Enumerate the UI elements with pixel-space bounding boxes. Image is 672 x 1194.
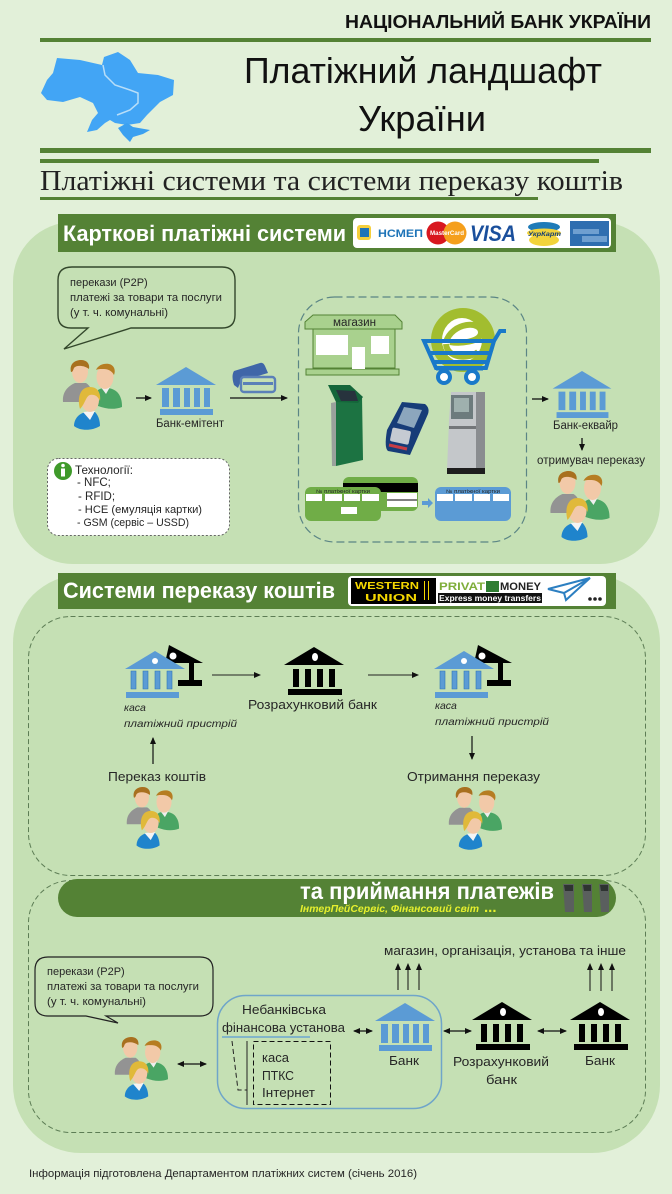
label: money transfer: Переказ коштів — [108, 769, 206, 784]
callout: transfers and payments: платежі за товари та послуги — [70, 292, 222, 304]
bank — [375, 1003, 435, 1068]
issuer bank — [156, 367, 225, 430]
callout: transfers and payments: (у т. ч. комунальні) — [47, 996, 146, 1008]
info box: technologies: - NFC; — [77, 477, 111, 489]
icon: recipient people — [550, 471, 610, 541]
logos: transfer systems: WESTERN — [355, 580, 419, 592]
channels box: каса — [262, 1050, 290, 1065]
footer note: Інформація підготовлена Департаментом платіжних систем (січень 2016) — [29, 1168, 417, 1180]
channels box — [254, 1042, 330, 1104]
icon: people — [115, 1037, 168, 1100]
arrow: sender up — [152, 738, 154, 764]
main title: України — [358, 98, 486, 139]
icon: e-commerce cart — [424, 308, 506, 383]
main title — [244, 50, 602, 139]
acquirer bank: Банк-еквайр — [553, 420, 618, 432]
panel: payment acceptance flow — [28, 878, 646, 1132]
logos: card systems: VISA — [470, 221, 516, 246]
panel: money transfer and payments — [13, 573, 660, 1153]
logos: transfer systems: UNION — [365, 592, 417, 604]
arrows: bank outputs — [398, 964, 419, 990]
info box: technologies: - GSM (сервіс – USSD) — [77, 517, 189, 529]
icon: sender people — [63, 360, 122, 430]
subtitle: Платіжні системи та системи переказу коштів — [40, 166, 623, 197]
logos: transfer systems: PRIVAT — [439, 581, 485, 593]
sender point: cash desk, payment device: платіжний пристрій — [124, 718, 237, 730]
callout: transfers and payments: платежі за товари та послуги — [47, 981, 199, 993]
info box: technologies: Технології: — [75, 465, 133, 477]
heading bar: money transfer systems — [58, 573, 616, 609]
panel: card payment systems — [13, 214, 660, 564]
icon: receiver people — [449, 787, 502, 850]
settlement bank: Розрахунковий — [453, 1054, 549, 1069]
label: receiving the transfer: Отримання переказу — [407, 769, 541, 784]
icon: POS terminal — [386, 402, 429, 455]
icon: payment kiosk — [328, 385, 363, 466]
info box: technologies: - HCE (емуляція картки) — [78, 504, 202, 516]
issuer bank: Банк-емітент — [156, 418, 225, 430]
icon: bank cards — [232, 363, 275, 392]
arrow: settlement bank to bank — [538, 1030, 566, 1032]
panel: transfer flow — [28, 616, 646, 876]
label: shop, organisation, institution: магазин, організація, установа та інше — [384, 943, 626, 958]
arrow: acquirer to recipient — [581, 438, 583, 450]
receiver point: cash desk, payment device: платіжний пристрій — [435, 716, 549, 728]
second bank: Банк — [585, 1053, 615, 1068]
icon: sender people — [127, 787, 179, 849]
icon: shop — [305, 315, 402, 375]
panel: non-bank financial institution: Небанківська — [242, 1002, 327, 1017]
arrow: issuer bank to acceptance points — [230, 397, 287, 399]
receiver point: cash desk, payment device — [434, 645, 549, 728]
logos: transfer systems — [348, 576, 606, 606]
settlement bank: банк — [486, 1072, 517, 1087]
icon: map of Ukraine — [41, 52, 174, 142]
heading bar: payment acceptance — [58, 878, 616, 917]
arrows: second bank outputs — [590, 964, 612, 991]
logos: card systems: MasterCard — [430, 231, 464, 237]
icon: card details form: № платіжної картки — [316, 489, 370, 495]
arrow: to acquirer bank — [532, 398, 548, 400]
arrow: receiver down — [471, 736, 473, 759]
logos: transfer systems: MONEY — [500, 581, 542, 593]
logos: card systems — [353, 218, 611, 248]
panel: non-bank financial institution: фінансова установа — [222, 1020, 346, 1035]
second bank — [570, 1002, 630, 1068]
sender point: cash desk, payment device: каса — [124, 702, 146, 714]
header: national bank name: НАЦІОНАЛЬНИЙ БАНК УКРАЇНИ — [345, 11, 651, 32]
receiver point: cash desk, payment device: каса — [435, 700, 457, 712]
logos: card systems: УкрКарт — [528, 231, 561, 238]
logos: transfer systems: Express money transfers — [439, 593, 541, 603]
main title: Платіжний ландшафт — [244, 50, 602, 91]
heading bar: card payment systems — [58, 214, 616, 252]
logos: card systems: НСМЕП — [378, 228, 423, 240]
info box: technologies — [48, 458, 230, 536]
icon: info — [54, 462, 72, 480]
settlement bank — [453, 1002, 549, 1087]
arrow: to receiving point — [368, 674, 418, 676]
panel: non-bank financial institution — [218, 996, 442, 1108]
icon: shop: магазин — [333, 317, 376, 329]
heading bar: money transfer systems: Системи переказу коштів — [63, 578, 335, 603]
acquirer bank — [553, 371, 618, 432]
heading bar: payment acceptance: ... — [484, 899, 497, 916]
bank: Банк — [389, 1053, 419, 1068]
icon: card details form — [305, 477, 511, 521]
arrow: bank to settlement bank — [444, 1030, 471, 1032]
arrow: people to financial institution — [178, 1063, 206, 1065]
settlement bank: Розрахунковий банк — [248, 697, 377, 712]
info box: technologies: - RFID; — [78, 491, 115, 503]
arrow: people to issuer bank — [136, 397, 151, 399]
icon: card details form: № платіжної картки — [446, 489, 500, 495]
callout: transfers and payments — [35, 957, 213, 1023]
heading bar: payment acceptance: ІнтерПейСервіс, Фінансовий світ — [300, 903, 479, 915]
recipient label: отримувач переказу — [537, 455, 645, 467]
panel: acceptance points — [298, 297, 526, 542]
settlement bank — [248, 647, 377, 712]
arrow: to settlement bank — [212, 674, 260, 676]
arrow: institution to bank — [354, 1030, 372, 1032]
channels box: Інтернет — [262, 1085, 315, 1100]
heading bar: card payment systems: Карткові платіжні системи — [63, 221, 346, 246]
callout: transfers and payments: (у т. ч. комунальні) — [70, 307, 168, 319]
heading bar: payment acceptance: та приймання платежів — [300, 878, 554, 904]
icon: terminals — [563, 884, 609, 912]
sender point: cash desk, payment device — [124, 645, 237, 730]
icon: ATM — [447, 392, 485, 474]
callout: transfers and payments: перекази (P2P) — [47, 966, 125, 978]
channels box: ПТКС — [262, 1068, 294, 1083]
callout: transfers and payments — [58, 267, 235, 349]
callout: transfers and payments: перекази (P2P) — [70, 277, 148, 289]
